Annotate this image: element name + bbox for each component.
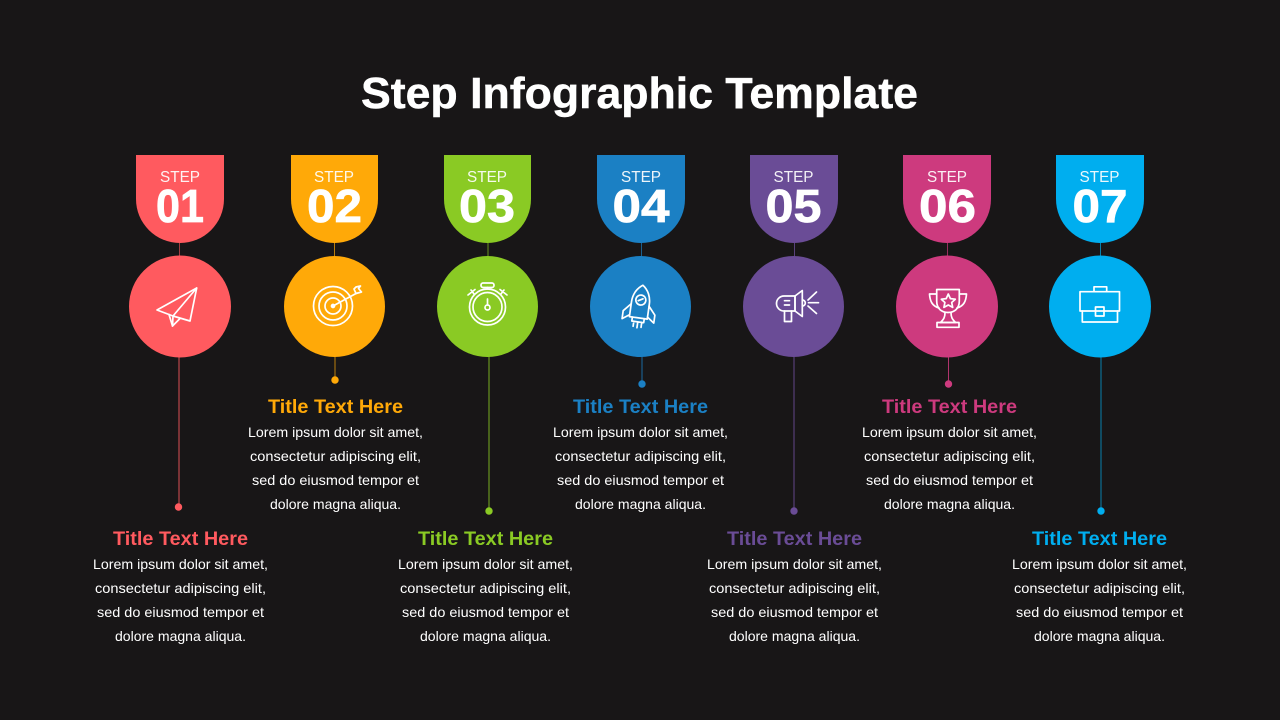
circle 01: [129, 256, 231, 358]
text block 01: dolore magna aliqua.: [115, 628, 246, 644]
connector line 07: [1097, 243, 1105, 515]
step 01: [93, 155, 268, 644]
badge 07: [1056, 155, 1144, 243]
circle 03: [437, 256, 538, 357]
badge 02: STEP: [314, 169, 354, 186]
title: Step Infographic Template: [361, 69, 918, 118]
text block 03: consectetur adipiscing elit,: [400, 580, 571, 596]
connector line 03: [485, 243, 493, 515]
text block 03: dolore magna aliqua.: [420, 628, 551, 644]
text block 04: Title Text Here: [573, 397, 708, 418]
step 05: [707, 155, 882, 644]
step 04: [553, 155, 728, 512]
circle 05: [743, 256, 844, 357]
connector line 06: [945, 243, 952, 388]
text block 06: [862, 397, 1037, 512]
text block 07: [1012, 529, 1187, 644]
text block 02: sed do eiusmod tempor et: [252, 472, 419, 488]
text block 03: Title Text Here: [418, 529, 553, 550]
text block 03: [398, 529, 573, 644]
text block 06: Title Text Here: [882, 397, 1017, 418]
badge 01: STEP: [160, 169, 200, 186]
connector line 04: [638, 243, 646, 388]
badge 03: STEP: [467, 169, 507, 186]
text block 07: Lorem ipsum dolor sit amet,: [1012, 556, 1187, 572]
text block 01: sed do eiusmod tempor et: [97, 604, 264, 620]
circle 06: [896, 256, 998, 358]
circle 07: [1049, 256, 1151, 358]
badge 04: 04: [612, 180, 670, 232]
text block 03: sed do eiusmod tempor et: [402, 604, 569, 620]
icon: rocket: [621, 283, 659, 330]
badge 05: [750, 155, 838, 243]
icon: trophy: [930, 290, 966, 327]
text block 01: consectetur adipiscing elit,: [95, 580, 266, 596]
text block 06: sed do eiusmod tempor et: [866, 472, 1033, 488]
badge 05: 05: [766, 180, 822, 232]
text block 04: consectetur adipiscing elit,: [555, 448, 726, 464]
badge 04: [597, 155, 685, 243]
text block 06: Lorem ipsum dolor sit amet,: [862, 424, 1037, 440]
icon: paper plane: [157, 288, 197, 326]
text block 05: Lorem ipsum dolor sit amet,: [707, 556, 882, 572]
text block 05: [707, 529, 882, 644]
badge 03: [444, 155, 531, 243]
text block 03: Lorem ipsum dolor sit amet,: [398, 556, 573, 572]
badge 05: STEP: [774, 169, 814, 186]
text block 02: dolore magna aliqua.: [270, 496, 401, 512]
circle 02: [284, 256, 385, 357]
icon: briefcase: [1080, 287, 1120, 322]
step 02: [248, 155, 423, 512]
step 06: [862, 155, 1037, 512]
circle 04: [590, 256, 691, 357]
connector line 02: [331, 243, 339, 384]
text block 02: Lorem ipsum dolor sit amet,: [248, 424, 423, 440]
badge 07: 07: [1072, 180, 1128, 232]
icon: megaphone: [777, 290, 818, 322]
text block 02: [248, 397, 423, 512]
text block 04: sed do eiusmod tempor et: [557, 472, 724, 488]
text block 06: dolore magna aliqua.: [884, 496, 1015, 512]
text block 04: dolore magna aliqua.: [575, 496, 706, 512]
text block 01: [93, 529, 268, 644]
icon: target: [314, 286, 362, 326]
text block 04: Lorem ipsum dolor sit amet,: [553, 424, 728, 440]
text block 04: [553, 397, 728, 512]
icon: stopwatch: [468, 283, 507, 325]
text block 02: Title Text Here: [268, 397, 403, 418]
text block 05: dolore magna aliqua.: [729, 628, 860, 644]
text block 05: sed do eiusmod tempor et: [711, 604, 878, 620]
badge 04: STEP: [621, 169, 661, 186]
badge 03: 03: [459, 180, 515, 232]
text block 02: consectetur adipiscing elit,: [250, 448, 421, 464]
badge 02: 02: [307, 180, 362, 232]
step 03: [398, 155, 573, 644]
badge 01: 01: [156, 180, 204, 232]
text block 07: Title Text Here: [1032, 529, 1167, 550]
badge 01: [136, 155, 224, 243]
text block 07: sed do eiusmod tempor et: [1016, 604, 1183, 620]
text block 05: consectetur adipiscing elit,: [709, 580, 880, 596]
text block 01: Title Text Here: [113, 529, 248, 550]
badge 06: 06: [919, 180, 976, 232]
badge 06: [903, 155, 991, 243]
badge 02: [291, 155, 378, 243]
text block 05: Title Text Here: [727, 529, 862, 550]
connector line 01: [175, 243, 182, 511]
text block 01: Lorem ipsum dolor sit amet,: [93, 556, 268, 572]
text block 06: consectetur adipiscing elit,: [864, 448, 1035, 464]
step 07: [1012, 155, 1187, 644]
badge 06: STEP: [927, 169, 967, 186]
connector line 05: [790, 243, 798, 515]
badge 07: STEP: [1080, 169, 1120, 186]
text block 07: consectetur adipiscing elit,: [1014, 580, 1185, 596]
text block 07: dolore magna aliqua.: [1034, 628, 1165, 644]
